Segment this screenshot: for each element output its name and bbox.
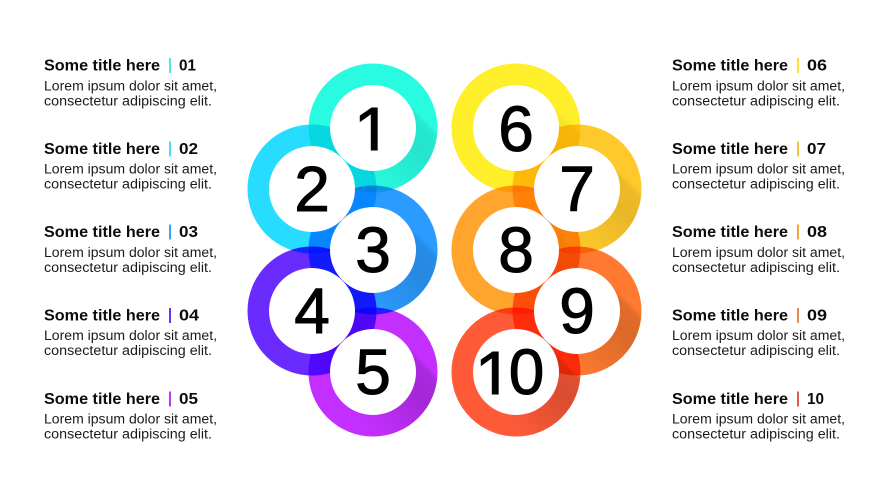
text block 10 bbox=[672, 391, 845, 442]
text block 02: 02 bbox=[179, 141, 198, 158]
text block 08: consectetur adipiscing elit. bbox=[672, 260, 840, 275]
text block 09 bbox=[672, 308, 845, 358]
text block 04: 04 bbox=[179, 308, 199, 324]
ring 8 bbox=[462, 196, 596, 330]
text block 03: Lorem ipsum dolor sit amet, bbox=[44, 245, 217, 260]
text block 07: 07 bbox=[807, 141, 826, 158]
text block 03 bbox=[44, 224, 217, 275]
white number discs bbox=[269, 85, 620, 415]
ring 4 bbox=[258, 258, 392, 391]
text block 05 bbox=[44, 391, 217, 442]
text block 04 bbox=[44, 308, 217, 358]
ring 5 bbox=[320, 318, 453, 452]
text block 01: Some title here bbox=[44, 58, 160, 74]
text block 04: consectetur adipiscing elit. bbox=[44, 343, 212, 358]
text block 09: Lorem ipsum dolor sit amet, bbox=[672, 328, 845, 343]
disc numbers: 6 bbox=[498, 93, 534, 165]
ring 1 bbox=[320, 74, 453, 208]
text block 06: Some title here bbox=[672, 58, 788, 74]
text block 03: 03 bbox=[179, 224, 198, 241]
text block 08: 08 bbox=[807, 224, 827, 241]
disc numbers: 7 bbox=[559, 153, 595, 225]
ring 3 bbox=[320, 196, 453, 330]
ring 9 bbox=[524, 258, 657, 391]
text block 08: Lorem ipsum dolor sit amet, bbox=[672, 245, 845, 260]
text block 02 bbox=[44, 141, 217, 192]
text block 07 bbox=[672, 141, 845, 192]
disc numbers: 4 bbox=[294, 275, 330, 347]
text block 10: consectetur adipiscing elit. bbox=[672, 426, 840, 442]
text block 06: Lorem ipsum dolor sit amet, bbox=[672, 78, 845, 94]
text block 05: Some title here bbox=[44, 391, 160, 408]
text block 10: Lorem ipsum dolor sit amet, bbox=[672, 412, 845, 426]
text block 09: consectetur adipiscing elit. bbox=[672, 343, 840, 358]
left ring cluster bbox=[258, 74, 453, 452]
text block 06: 06 bbox=[807, 58, 827, 74]
text block 09: Some title here bbox=[672, 308, 788, 324]
text block 06 bbox=[672, 58, 845, 108]
text block 05: 05 bbox=[179, 391, 198, 408]
text block 08: Some title here bbox=[672, 224, 788, 241]
disc numbers: 8 bbox=[498, 214, 534, 286]
ring 2 bbox=[258, 136, 366, 242]
disc numbers: 1 bbox=[353, 94, 393, 173]
text block 01: 01 bbox=[179, 58, 196, 74]
text block 10: Some title here bbox=[672, 391, 788, 408]
disc numbers: 9 bbox=[559, 275, 595, 347]
text block 01: Lorem ipsum dolor sit amet, bbox=[44, 78, 217, 94]
text block 07: Some title here bbox=[672, 141, 788, 158]
disc numbers: 5 bbox=[355, 336, 391, 408]
disc numbers: 1 bbox=[474, 338, 514, 417]
text block 02: Lorem ipsum dolor sit amet, bbox=[44, 162, 217, 176]
disc numbers: 0 bbox=[509, 336, 544, 408]
disc numbers bbox=[295, 106, 592, 395]
text block 10: 10 bbox=[807, 391, 824, 408]
text block 08 bbox=[672, 224, 845, 275]
disc numbers: 2 bbox=[294, 153, 330, 225]
text block 07: consectetur adipiscing elit. bbox=[672, 176, 840, 192]
text block 05: consectetur adipiscing elit. bbox=[44, 426, 212, 442]
text block 06: consectetur adipiscing elit. bbox=[672, 94, 840, 108]
text block 07: Lorem ipsum dolor sit amet, bbox=[672, 162, 845, 176]
text block 09: 09 bbox=[807, 308, 827, 324]
text block 02: consectetur adipiscing elit. bbox=[44, 176, 212, 192]
text block 03: Some title here bbox=[44, 224, 160, 241]
ring 7 bbox=[524, 136, 657, 269]
text block 04: Lorem ipsum dolor sit amet, bbox=[44, 328, 217, 343]
text block 02: Some title here bbox=[44, 141, 160, 158]
right ring cluster bbox=[462, 74, 657, 452]
text block 05: Lorem ipsum dolor sit amet, bbox=[44, 412, 217, 426]
ring 6 bbox=[462, 74, 596, 208]
text block 01 bbox=[44, 58, 217, 108]
ring 10 bbox=[462, 318, 596, 452]
text block 04: Some title here bbox=[44, 308, 160, 324]
text block 01: consectetur adipiscing elit. bbox=[44, 94, 212, 108]
text block 03: consectetur adipiscing elit. bbox=[44, 260, 212, 275]
disc numbers: 3 bbox=[355, 214, 391, 286]
